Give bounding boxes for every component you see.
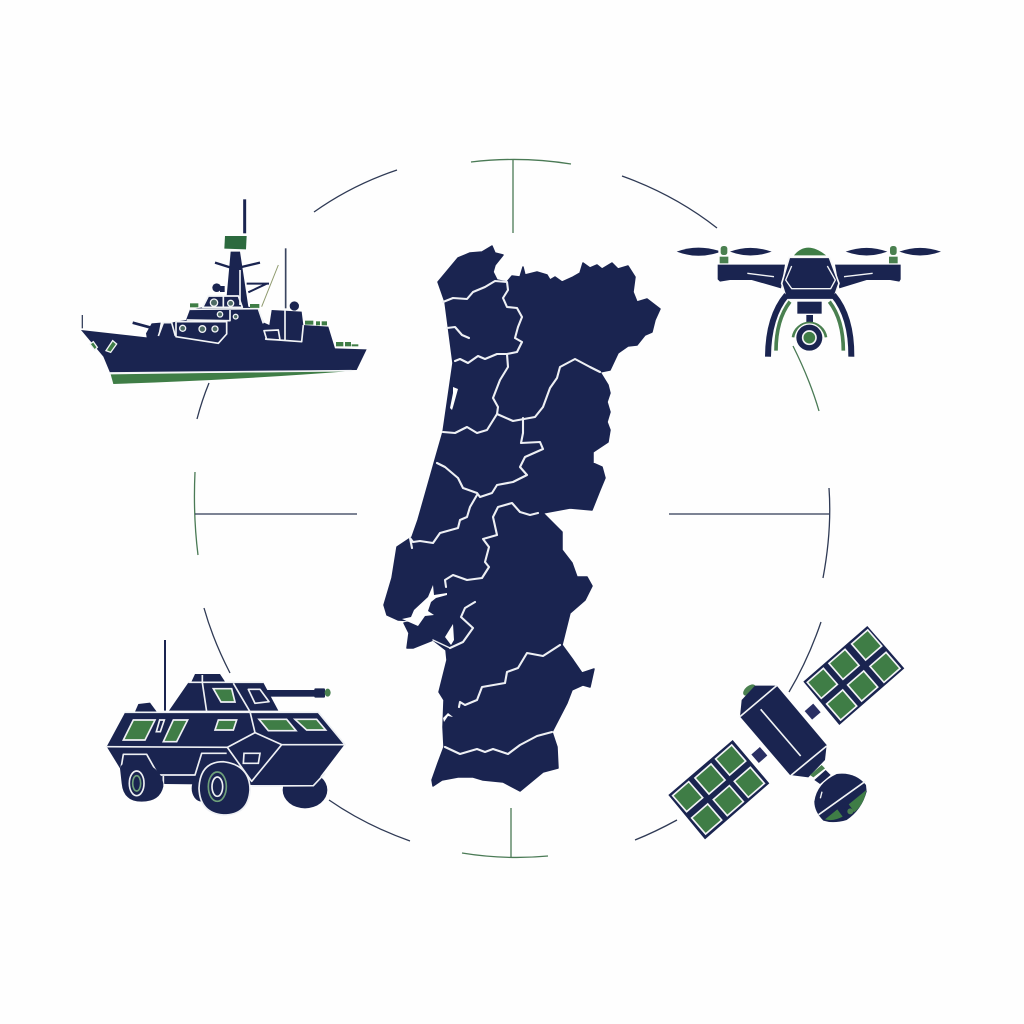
hull [107,713,345,786]
gimbal mount [797,302,822,324]
dome [794,248,826,255]
deck equipment [190,303,358,346]
panel connectors [751,704,821,763]
solar panel frames [668,626,904,839]
radar panel [224,236,247,249]
green windows [123,689,326,763]
radar domes [212,283,299,311]
gun barrel [260,688,331,698]
reticle ring with crosshair ticks [194,159,830,858]
portholes [180,299,238,332]
waterline [111,371,352,384]
rear and inner wheels [192,772,327,808]
hull panel lines [107,675,345,786]
map of Portugal with regional borders [384,246,660,791]
antenna dish [814,774,867,822]
solar cells [673,630,900,834]
superstructure outlines [110,270,352,373]
camera [793,323,826,351]
body [782,257,839,300]
icon: naval frigate [81,199,367,384]
mast and antennas [82,199,286,328]
antenna [162,640,168,711]
top nub [741,682,758,698]
main body [740,686,827,777]
icon: quadcopter drone [677,246,941,357]
dish neck [810,765,831,784]
arms [718,265,901,288]
hubcaps [129,771,226,801]
estuaries and lagoon [402,387,458,722]
landing legs [768,295,851,357]
icon: armoured vehicle [107,640,345,815]
regional borders [410,281,600,754]
propellers [677,248,941,256]
hull and superstructure [81,252,367,373]
motors [720,246,898,263]
bow hatches [90,341,117,352]
hatch [135,703,157,712]
turret [169,674,278,711]
icon: satellite [668,626,904,839]
front wheels [120,762,250,815]
